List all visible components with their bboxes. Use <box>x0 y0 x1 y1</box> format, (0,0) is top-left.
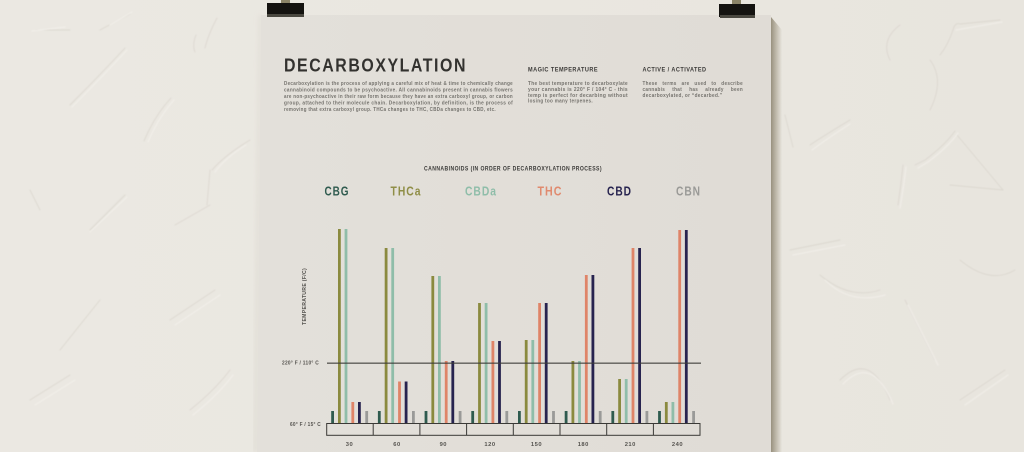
intro paragraph: group, attached to their molecule chain. Decarboxylation, by definition, is the process of <box>284 100 513 106</box>
bars: 90 minutes <box>425 276 462 423</box>
bars: 180 minutes <box>565 275 602 423</box>
section: active / activated <box>642 67 743 99</box>
section: magic temperature <box>528 67 628 105</box>
y-axis title: TEMPERATURE (F/C) <box>302 268 308 325</box>
legend: cannabinoid names: THCa <box>390 184 422 198</box>
text: magic temperature <box>528 81 628 105</box>
intro paragraph: Decarboxylation is the process of applying a careful mix of heat & time to chemically change <box>284 81 513 87</box>
x-axis labels: 180 <box>578 442 589 448</box>
poster sheet <box>257 15 771 452</box>
x-axis labels: 210 <box>625 442 636 448</box>
bars: 30 minutes <box>331 229 368 423</box>
x-axis labels: 240 <box>672 442 683 448</box>
x-axis labels: 60 <box>393 442 401 448</box>
legend: cannabinoid names: CBG <box>324 184 350 198</box>
intro paragraph: cannabinoid compounds to be psychoactive. All cannabinoids present in cannabis flowers <box>284 88 513 94</box>
x-axis labels: 90 <box>440 442 447 448</box>
bars: 210 minutes <box>611 248 648 423</box>
text: magic temperature: The best temperature to decarboxylate <box>528 81 628 87</box>
heading: magic temperature: MAGIC TEMPERATURE <box>528 67 598 73</box>
binder clip: left <box>267 0 304 17</box>
bars: 150 minutes <box>518 303 555 423</box>
legend: cannabinoid names: CBD <box>607 184 632 198</box>
x-axis labels: 120 <box>484 442 496 448</box>
title: DECARBOXYLATION <box>284 54 467 76</box>
y-axis label: 60 F: 60° F / 15° C <box>290 422 321 428</box>
intro paragraph: removing that extra carboxyl group. THCa changes to THC, CBDa changes to CBD, etc. <box>284 107 496 113</box>
legend: cannabinoid names: THC <box>538 184 562 198</box>
legend: cannabinoid names: CBDa <box>465 184 497 198</box>
bars: 120 minutes <box>471 303 508 423</box>
text: active / activated: cannabis that has already been <box>642 87 743 93</box>
poster shadow <box>254 15 782 452</box>
x-axis labels: 150 <box>531 442 542 448</box>
legend: cannabinoid names <box>324 184 701 198</box>
heading: active / activated: ACTIVE / ACTIVATED <box>642 67 707 73</box>
text: active / activated: decarboxylated, or “decarbed.” <box>642 93 723 99</box>
text: active / activated <box>642 81 743 99</box>
x-axis labels <box>346 442 683 448</box>
bar chart <box>331 229 695 423</box>
text: magic temperature: your cannabis is 220° F / 104° C - this <box>528 87 628 93</box>
text: active / activated: These terms are used to describe <box>642 81 743 87</box>
binder clip: right <box>719 0 755 18</box>
bars: 60 minutes <box>378 248 415 423</box>
x-axis time boxes <box>327 424 700 435</box>
x-axis labels: 30 <box>346 442 353 448</box>
intro paragraph <box>284 81 513 113</box>
bars: 240 minutes <box>658 230 695 423</box>
intro paragraph: are non-psychoactive in their raw form because they have an extra carboxyl group, or carbon <box>284 94 513 100</box>
legend: cannabinoid names: CBN <box>676 184 701 198</box>
chart heading: CANNABINOIDS (IN ORDER OF DECARBOXYLATION PROCESS) <box>424 167 602 173</box>
text: magic temperature: temp is perfect for decarbing without <box>528 93 628 99</box>
text: magic temperature: losing too many terpenes. <box>528 99 593 105</box>
reference line: 220 F <box>327 363 701 364</box>
y-axis label: 220 F: 220° F / 110° C <box>282 360 319 366</box>
